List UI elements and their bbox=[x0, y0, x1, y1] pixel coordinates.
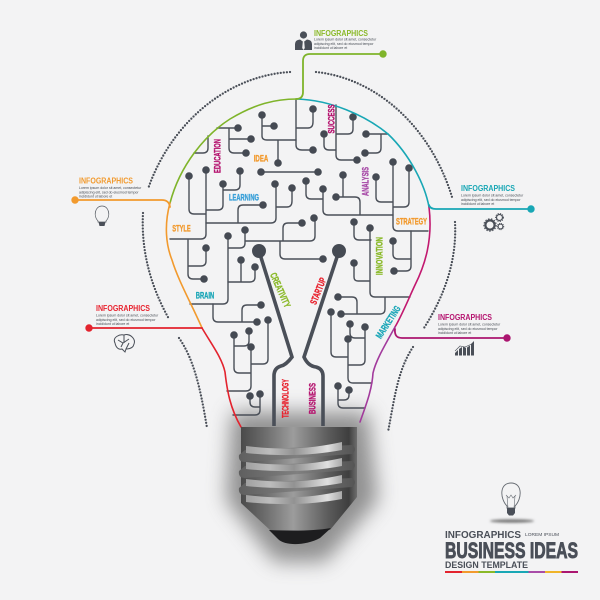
icon: gears bbox=[484, 214, 504, 231]
heading: INFOGRAPHICS bbox=[79, 176, 134, 186]
panel: right teal callout bbox=[429, 184, 535, 231]
body text: adipiscing elit, sed do eiusmod tempor bbox=[79, 190, 139, 194]
dotted halo around bulb bbox=[143, 72, 455, 432]
connector end dot bbox=[527, 205, 535, 213]
body text: Lorem ipsum dolor sit amet, consectetur bbox=[96, 314, 159, 318]
body text: incididunt ut labore et bbox=[461, 202, 494, 206]
body text: Lorem ipsum dolor sit amet, consectetur bbox=[438, 322, 501, 326]
heading: infographics: INFOGRAPHICS bbox=[445, 529, 521, 541]
heading: INFOGRAPHICS bbox=[314, 29, 369, 38]
icon: businessman bbox=[295, 31, 312, 50]
connector end dot bbox=[85, 324, 93, 332]
body text: Lorem ipsum dolor sit amet, consectetur bbox=[461, 194, 524, 198]
label: marketing: MARKETING bbox=[374, 304, 403, 341]
lamp screw base bbox=[239, 427, 357, 544]
body text: adipiscing elit, sed do eiusmod tempor bbox=[461, 198, 521, 202]
lamp base shadow bbox=[226, 412, 378, 562]
body text: Lorem ipsum dolor sit amet, consectetur bbox=[79, 186, 142, 190]
connector bbox=[429, 205, 531, 209]
body text: adipiscing elit, sed do eiusmod tempor bbox=[438, 327, 498, 331]
connector bbox=[75, 200, 170, 207]
connector bbox=[296, 54, 383, 99]
lamp tip bbox=[269, 528, 331, 544]
label: technology: TECHNOLOGY bbox=[280, 379, 291, 418]
label: startup: STARTUP bbox=[308, 276, 329, 306]
label: analysis: ANALYSIS bbox=[360, 167, 371, 196]
panel: top green callout bbox=[295, 29, 387, 99]
icon: growth chart bbox=[455, 341, 474, 356]
connector end dot bbox=[71, 196, 79, 204]
icon: brain bbox=[114, 335, 134, 352]
icon: light bulb bbox=[95, 206, 109, 226]
rainbow bar bbox=[445, 571, 578, 573]
panel: title block bbox=[445, 483, 578, 573]
body text: incididunt ut labore et bbox=[438, 331, 471, 335]
connector bbox=[89, 327, 202, 329]
label: learning: LEARNING bbox=[229, 192, 259, 204]
label: brain: BRAIN bbox=[196, 290, 214, 302]
connector bbox=[395, 329, 507, 338]
body text: incididunt ut labore et bbox=[79, 194, 112, 198]
icon: outline bulb bbox=[490, 483, 534, 523]
panel: right magenta callout bbox=[395, 313, 511, 356]
body text: adipiscing elit, sed do eiusmod tempor bbox=[314, 42, 374, 46]
connector end dot bbox=[379, 50, 387, 58]
heading: INFOGRAPHICS bbox=[96, 304, 151, 313]
panel: left orange callout bbox=[71, 176, 170, 226]
heading: INFOGRAPHICS bbox=[461, 184, 516, 193]
filament wires bbox=[252, 244, 346, 426]
sub label: lorem ipsum: LOREM IPSUM bbox=[525, 532, 559, 537]
circuit tree bbox=[170, 99, 428, 415]
heading: INFOGRAPHICS bbox=[438, 313, 493, 322]
bulb outline bbox=[166, 99, 430, 427]
body text: Lorem ipsum dolor sit amet, consectetur bbox=[314, 38, 377, 42]
connector end dot bbox=[503, 334, 511, 342]
label: strategy: STRATEGY bbox=[396, 216, 427, 228]
panel: left red callout bbox=[85, 304, 202, 352]
label: style: STYLE bbox=[172, 224, 191, 234]
body text: incididunt ut labore et bbox=[314, 46, 347, 50]
label: idea: IDEA bbox=[254, 154, 268, 164]
label: success: SUCCESS bbox=[326, 104, 337, 134]
label: creativity: CREATIVITY bbox=[267, 271, 292, 310]
circuit nodes bbox=[185, 105, 413, 400]
label: innovation: INNOVATION bbox=[374, 237, 385, 275]
label: business: BUSINESS bbox=[307, 383, 318, 414]
label: education: EDUCATION bbox=[212, 139, 223, 173]
subtitle: design template: DESIGN TEMPLATE bbox=[445, 560, 528, 571]
body text: incididunt ut labore et bbox=[96, 322, 129, 326]
body text: adipiscing elit, sed do eiusmod tempor bbox=[96, 318, 156, 322]
